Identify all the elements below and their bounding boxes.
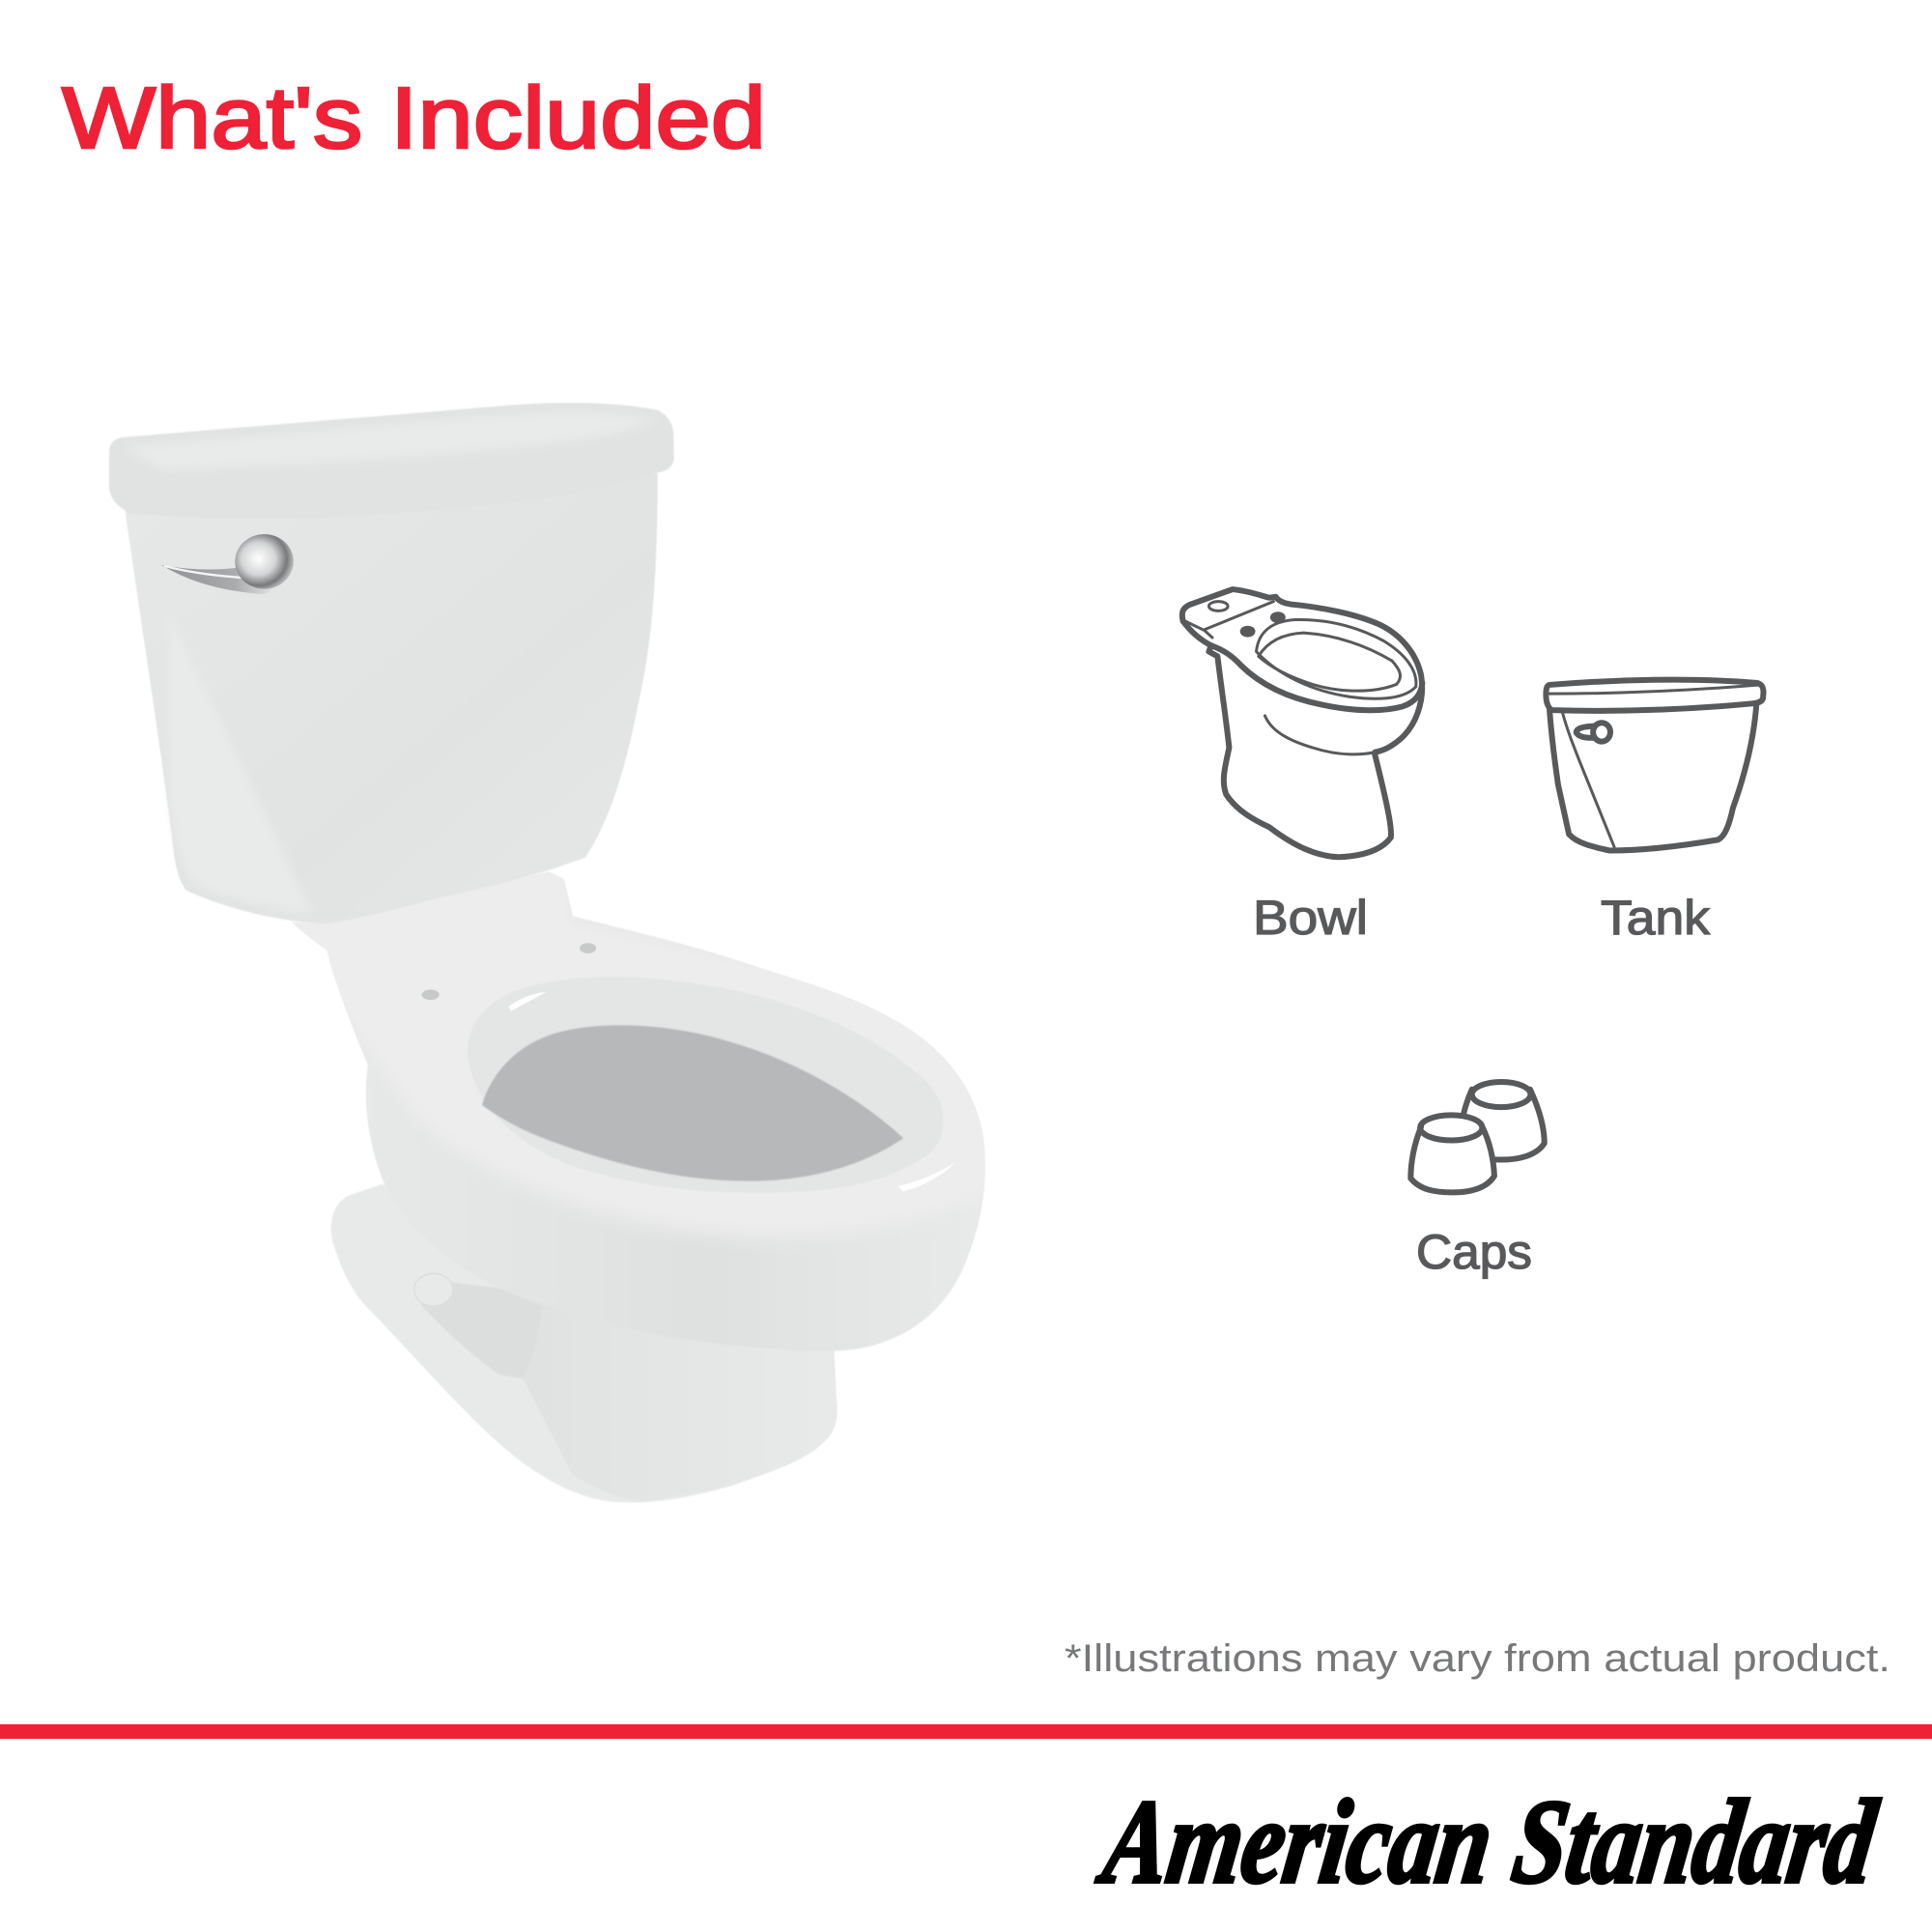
side recess: [420, 1282, 544, 1378]
rim lip: [468, 977, 944, 1193]
label: Tank: Tank: [1601, 891, 1711, 945]
bowl body: [292, 872, 985, 1351]
base foot: [331, 1184, 838, 1502]
seat bolt holes: [422, 989, 440, 1000]
tank body: [125, 472, 658, 923]
tank lid top: [122, 412, 658, 469]
trunk: [523, 1286, 837, 1502]
tank side facet: [169, 613, 312, 913]
label: Caps: Caps: [1416, 1225, 1532, 1279]
footnote: *Illustrations may vary from actual product.: [1065, 1637, 1890, 1680]
label: Bowl: Bowl: [1253, 891, 1368, 945]
icon: bowl: [1182, 589, 1422, 857]
red divider bar: [0, 1724, 1932, 1739]
title: What's Included: [62, 71, 766, 167]
bowl deck and rim: [293, 873, 844, 1234]
tank lid front: [109, 403, 674, 518]
bowl basin: [482, 1025, 903, 1181]
flush lever: [162, 534, 294, 594]
product photo: toilet: [109, 403, 1011, 1502]
icon: caps: [1410, 1082, 1545, 1192]
glaze highlights: [508, 992, 956, 1191]
mounting bolt cover: [414, 1273, 453, 1306]
icon: tank: [1546, 680, 1763, 851]
